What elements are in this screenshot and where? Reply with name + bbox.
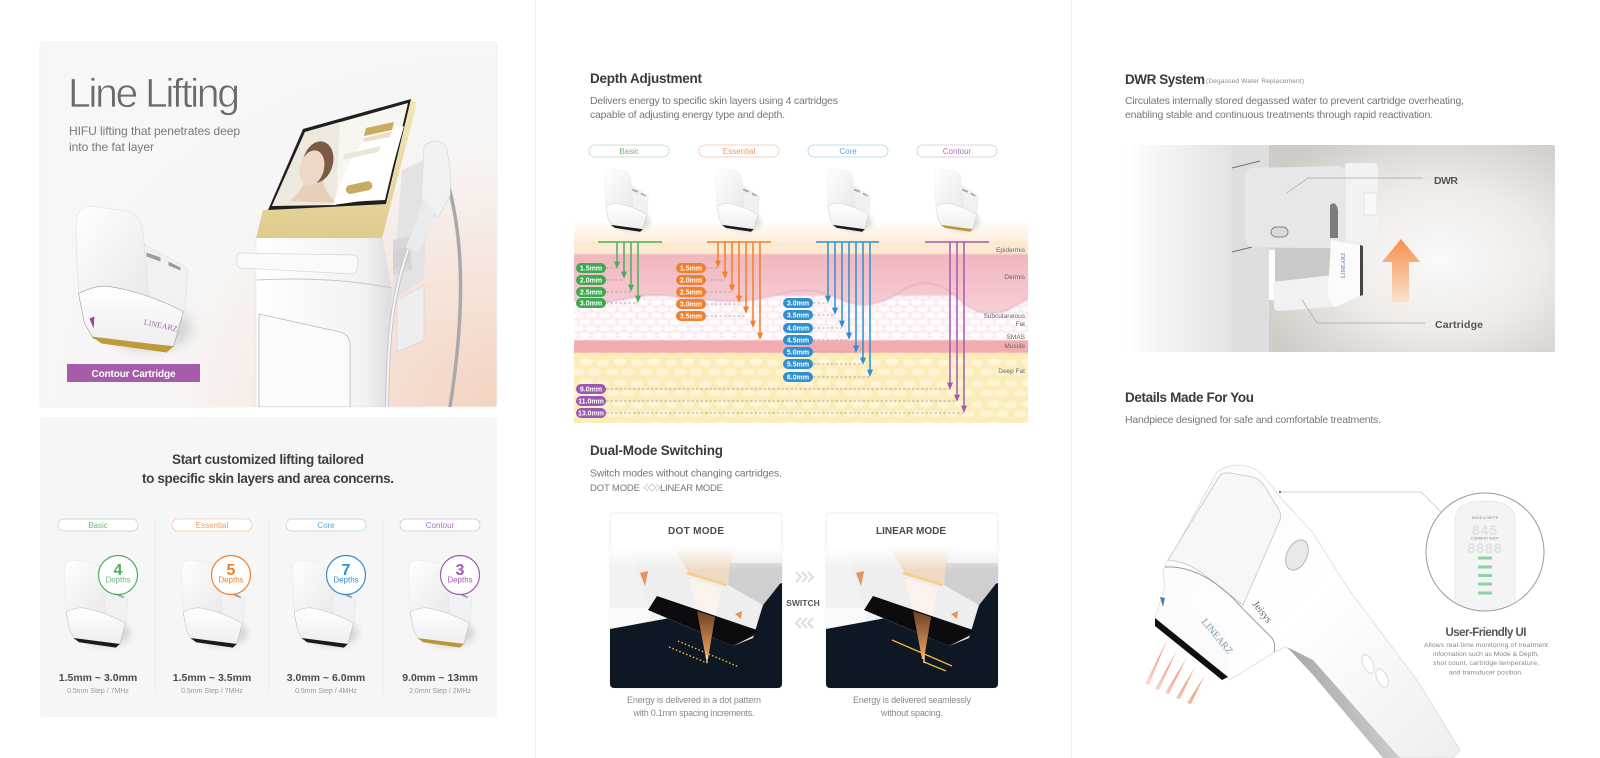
- card: essential: 0.5mm Step / 7MHz: [181, 688, 243, 695]
- linear mode heading: LINEAR MODE: [876, 526, 946, 537]
- text: linear mode caption: Energy is delivered seamlessly: [853, 695, 972, 705]
- text: user-friendly ui: Allows real-time monitoring of treatment: [1424, 642, 1548, 649]
- text: dot mode caption: Energy is delivered in a dot pattern: [627, 695, 761, 705]
- text: dual-mode description: DOT MODE: [590, 483, 640, 494]
- card: core: 0.5mm Step / 4MHz: [295, 688, 357, 695]
- panel: depths by cartridge: [40, 417, 497, 717]
- contour depths: 13.0mm: [578, 410, 604, 418]
- subtitle: into the fat layer: [69, 140, 154, 154]
- column divider: [536, 0, 1072, 758]
- core depths: 3.5mm: [787, 312, 809, 320]
- essential depths: 3.0mm: [680, 302, 702, 308]
- callout: user interface zoom: MODE & DEPTH: [1472, 516, 1499, 520]
- core depths: 3.0mm: [787, 300, 809, 308]
- heading: to specific skin layers and area concerns.: [142, 471, 394, 486]
- callout: user interface zoom: CURRENT SHOT: [1471, 536, 1500, 540]
- callout lines: [1287, 178, 1425, 323]
- illustration: handpiece: Jeisys: [1250, 599, 1274, 626]
- orange arrow: [1382, 239, 1420, 302]
- panel: line lifting hero: [40, 42, 497, 407]
- card: basic: Depths: [105, 576, 131, 584]
- card: essential: 1.5mm ~ 3.5mm: [173, 672, 251, 684]
- contour depths: [576, 242, 989, 418]
- card: basic: 1.5mm ~ 3.0mm: [59, 672, 137, 684]
- text: user-friendly ui: [1424, 627, 1548, 676]
- chart legend: cartridge pills: Basic: [619, 147, 639, 156]
- dot mode heading: DOT MODE: [668, 526, 724, 537]
- basic depths: 3.0mm: [580, 300, 602, 308]
- chart legend: cartridge pills: Essential: [723, 147, 755, 156]
- card: basic: 4: [114, 562, 123, 579]
- core depths: 5.0mm: [787, 350, 809, 356]
- card: core: Depths: [333, 576, 359, 584]
- core depths: 5.5mm: [787, 362, 809, 368]
- text: dwr description: enabling stable and continuous treatments through rapid reactivation.: [1125, 109, 1433, 121]
- card: core: 3.0mm ~ 6.0mm: [287, 672, 365, 684]
- text: depth description: [590, 95, 838, 121]
- text: dual-mode description: Switch modes without changing cartridges.: [590, 468, 782, 480]
- illustration: handpiece: [1145, 465, 1460, 758]
- label: contour cartridge: Contour Cartridge: [92, 369, 176, 380]
- contour depths: 11.0mm: [578, 398, 604, 406]
- text: user-friendly ui: information such as Mode & Depth,: [1433, 651, 1539, 658]
- core depths: 4.5mm: [787, 338, 809, 344]
- card: essential: [172, 519, 252, 695]
- card: basic: 0.5mm Step / 7MHz: [67, 688, 129, 695]
- text: dot mode caption: with 0.1mm spacing increments.: [632, 708, 754, 718]
- text: dual-mode description: LINEAR MODE: [660, 483, 723, 494]
- text: user-friendly ui: User-Friendly UI: [1446, 627, 1526, 639]
- heading: [142, 452, 394, 486]
- chart legend: cartridge pills: [589, 145, 997, 157]
- linear mode illustration: [826, 546, 998, 688]
- basic depths: 2.5mm: [580, 290, 602, 296]
- label: cartridge: Cartridge: [1435, 319, 1483, 331]
- illustration: contour cartridge: [76, 206, 192, 352]
- switch icon: [786, 572, 820, 628]
- layer labels: SMAS: [1007, 334, 1026, 341]
- layer labels: [983, 247, 1026, 375]
- heading: dwr system: [1125, 72, 1304, 87]
- cartridge images: [605, 169, 980, 232]
- contour depths: 9.0mm: [580, 386, 602, 394]
- callout: user interface zoom: 8888: [1467, 540, 1503, 556]
- card: essential: Depths: [218, 576, 244, 584]
- heading: details made for you: Details Made For You: [1125, 390, 1254, 405]
- text: dual-mode description: [590, 468, 782, 494]
- text: dwr description: Circulates internally stored degassed water to prevent cartridge overheating,: [1125, 95, 1464, 107]
- heading: depth adjustment: Depth Adjustment: [590, 71, 702, 86]
- basic depths: 1.5mm: [580, 266, 602, 272]
- heading: dwr system: (Degassed Water Replacement): [1206, 78, 1304, 85]
- layer labels: Subcutaneous: [983, 313, 1026, 320]
- core depths: 6.0mm: [787, 374, 809, 382]
- text: linear mode caption: without spacing.: [880, 708, 943, 718]
- text: linear mode caption: [853, 695, 972, 718]
- chart legend: cartridge pills: Contour: [943, 147, 972, 156]
- core depths: [783, 242, 879, 382]
- essential depths: [676, 242, 771, 339]
- layer labels: Dermis: [1004, 274, 1026, 281]
- heading: dwr system: DWR System: [1125, 72, 1205, 87]
- card: basic: Basic: [88, 521, 108, 530]
- chart: skin depth diagram: [570, 145, 1032, 427]
- heading: Start customized lifting tailored: [172, 452, 364, 467]
- label: dwr: DWR: [1434, 175, 1458, 187]
- dot mode illustration: [610, 546, 782, 688]
- callout: user interface zoom: [1279, 491, 1544, 611]
- card: contour: 2.0mm Step / 2MHz: [409, 688, 471, 695]
- text: dot mode caption: [627, 695, 761, 718]
- basic depths: [576, 242, 662, 308]
- essential depths: 1.5mm: [680, 266, 702, 272]
- text: details description: Handpiece designed for safe and comfortable treatments.: [1125, 414, 1381, 426]
- subtitle: HIFU lifting that penetrates deep: [69, 124, 240, 138]
- panel: dot mode: [610, 513, 782, 688]
- card: contour: Depths: [447, 576, 473, 584]
- illustration: treatment machine: [237, 99, 461, 407]
- card: contour: 9.0mm ~ 13mm: [402, 672, 478, 684]
- basic depths: 2.0mm: [580, 278, 602, 284]
- illustration: contour cartridge: LINEARZ: [143, 318, 179, 334]
- text: depth description: Delivers energy to specific skin layers using 4 cartridges: [590, 95, 838, 107]
- subtitle: [69, 124, 240, 154]
- card: essential: Essential: [196, 521, 228, 530]
- label: contour cartridge: [67, 364, 200, 382]
- illustration: dwr unit: LINEARZ: [1341, 252, 1347, 278]
- chart legend: cartridge pills: Core: [839, 147, 857, 156]
- card: contour: 3: [456, 562, 465, 579]
- layer labels: Deep Fat: [998, 368, 1025, 375]
- card: core: [286, 519, 366, 695]
- skin layers: [570, 218, 1032, 427]
- essential depths: 2.5mm: [680, 290, 702, 296]
- illustration: dwr unit: [1125, 145, 1555, 352]
- card: basic: [58, 519, 138, 695]
- panel: linear mode: [826, 513, 998, 688]
- card: contour: [400, 519, 480, 695]
- text: user-friendly ui: shot count, cartridge temperature,: [1433, 660, 1539, 667]
- switch icon: SWITCH: [786, 598, 820, 608]
- illustration: handpiece: LINEARZ: [1199, 617, 1235, 657]
- card: essential: 5: [227, 562, 236, 579]
- card: core: 7: [342, 562, 351, 579]
- card: core: Core: [317, 521, 335, 530]
- text: user-friendly ui: and transducer position.: [1449, 670, 1523, 676]
- card: contour: Contour: [426, 521, 455, 530]
- core depths: 4.0mm: [787, 326, 809, 332]
- callout: user interface zoom: 845: [1472, 522, 1498, 538]
- layer labels: Fat: [1016, 321, 1025, 328]
- text: depth description: capable of adjusting energy type and depth.: [590, 109, 785, 121]
- essential depths: 2.0mm: [680, 278, 702, 284]
- text: dwr description: [1125, 95, 1464, 121]
- essential depths: 3.5mm: [680, 314, 702, 320]
- heading: dual-mode switching: Dual-Mode Switching: [590, 443, 723, 458]
- layer labels: Epidermis: [996, 247, 1026, 254]
- title: Line Lifting: [68, 70, 240, 116]
- layer labels: Muscle: [1004, 343, 1025, 350]
